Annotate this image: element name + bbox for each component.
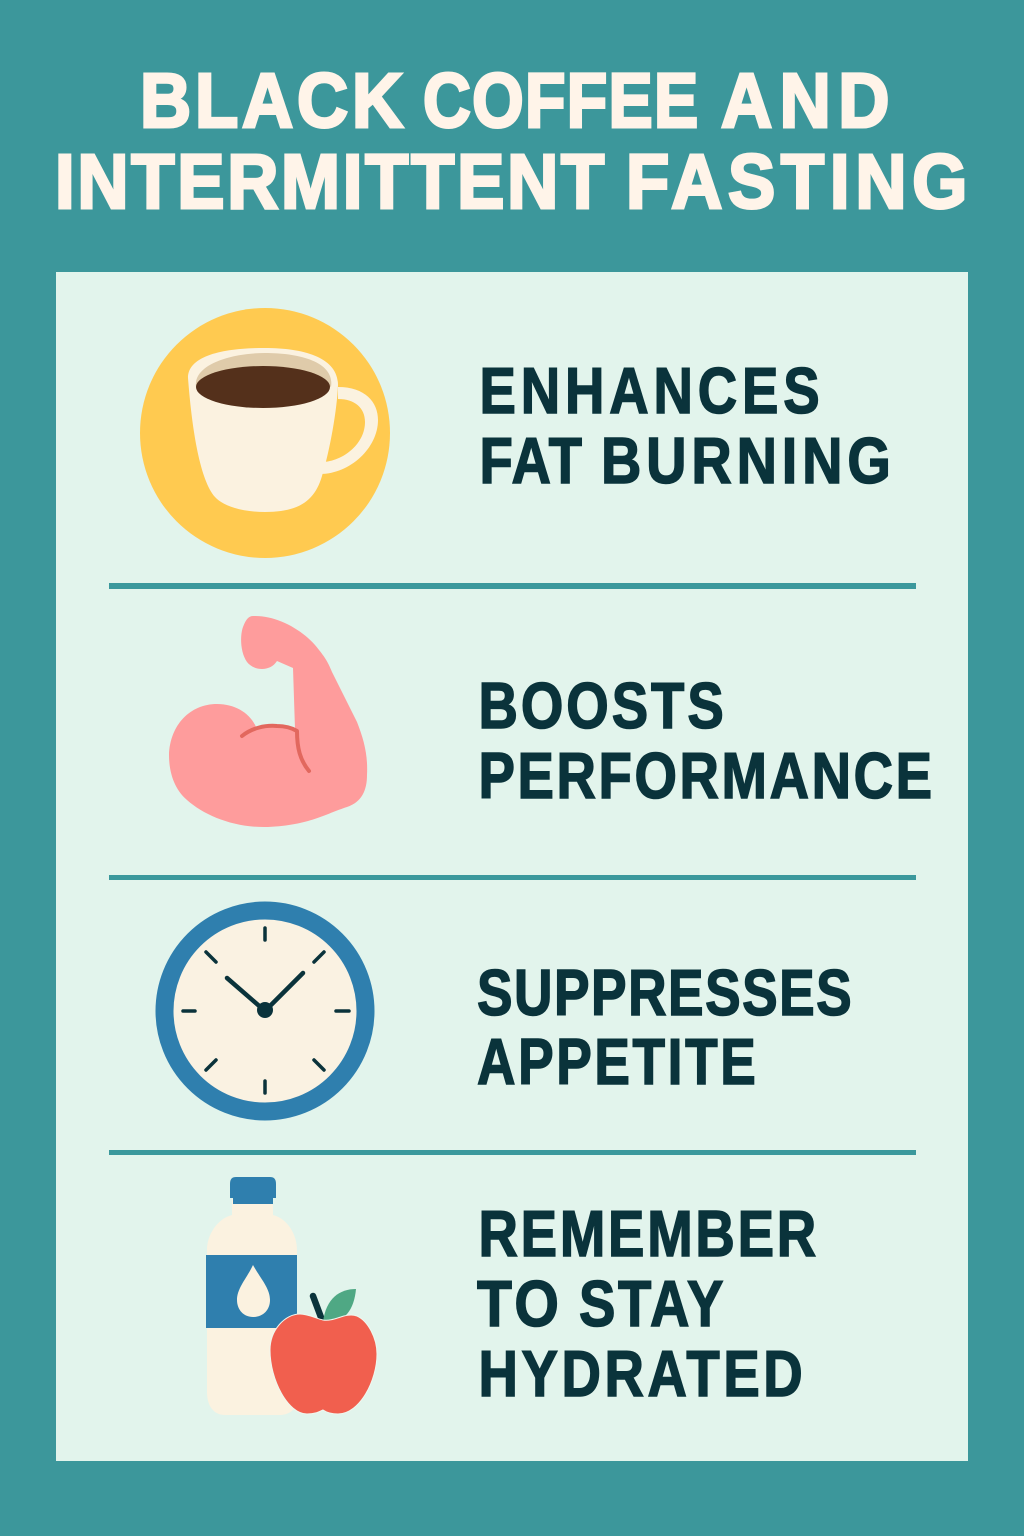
- title: BLACK: [140, 57, 403, 144]
- label: boosts performance: [478, 670, 932, 812]
- icon: clock: [164, 910, 366, 1112]
- label: suppresses appetite: [477, 956, 852, 1098]
- label: suppresses appetite: SUPPRESSES: [477, 956, 852, 1029]
- label: suppresses appetite: APPETITE: [477, 1025, 756, 1098]
- label: enhances fat burning: FAT: [480, 425, 582, 497]
- icon: water bottle and apple: [206, 1177, 377, 1415]
- title: [55, 57, 967, 225]
- title: FASTING: [626, 138, 967, 225]
- label: remember to stay hydrated: [477, 1198, 816, 1410]
- label: enhances fat burning: ENHANCES: [480, 355, 820, 427]
- label: remember to stay hydrated: REMEMBER: [478, 1198, 816, 1270]
- title: INTERMITTENT: [55, 138, 604, 225]
- icon: flexed arm: [169, 616, 367, 827]
- label: remember to stay hydrated: HYDRATED: [478, 1338, 803, 1410]
- title: COFFEE: [423, 58, 698, 144]
- label: boosts performance: PERFORMANCE: [478, 740, 932, 812]
- label: remember to stay hydrated: TO: [477, 1268, 559, 1340]
- label: enhances fat burning: BURNING: [601, 424, 891, 497]
- label: remember to stay hydrated: STAY: [579, 1268, 723, 1340]
- icon: coffee cup: [140, 308, 390, 558]
- title: AND: [721, 57, 889, 144]
- label: enhances fat burning: [480, 355, 891, 497]
- panel: benefits: [56, 272, 968, 1461]
- label: boosts performance: BOOSTS: [478, 670, 724, 742]
